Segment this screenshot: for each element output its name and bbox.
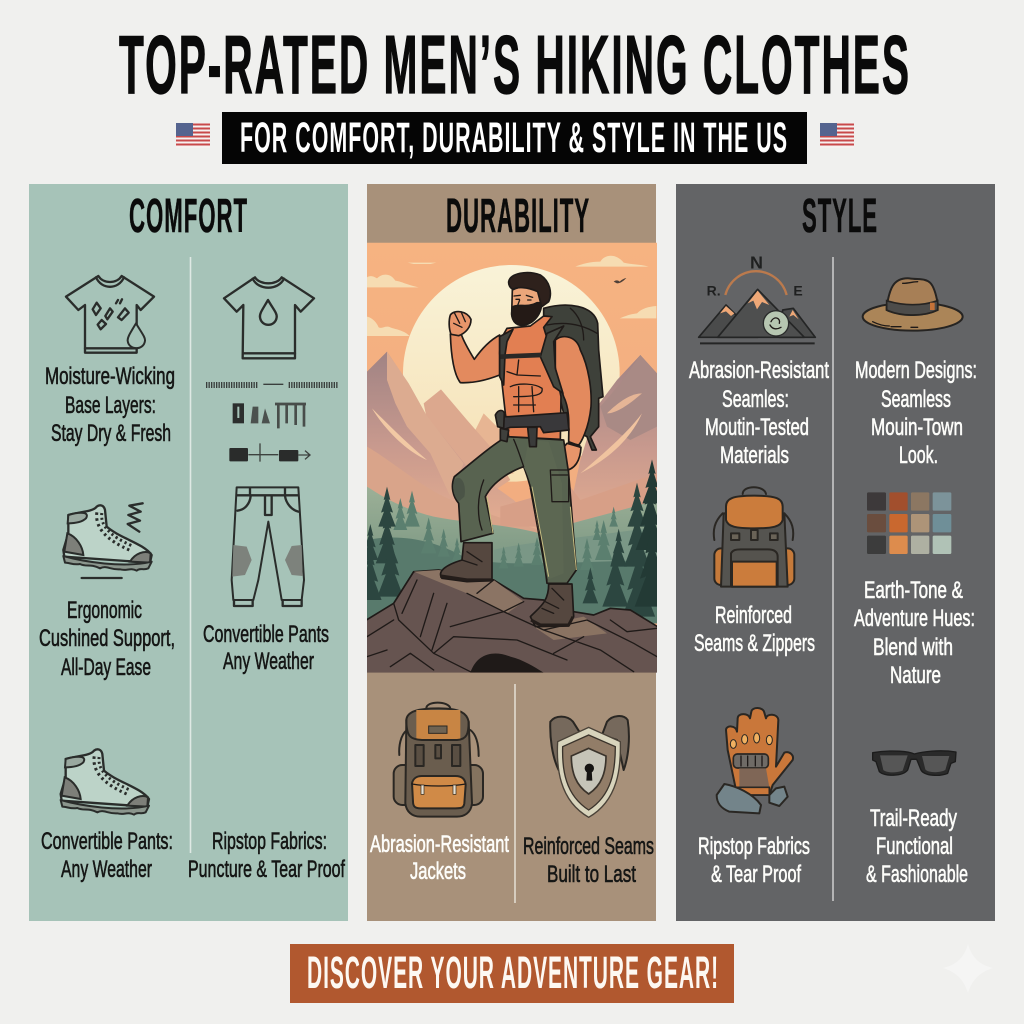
panel: comfort: COMFORT (129, 190, 248, 243)
mountains (367, 352, 657, 533)
text: reinforced seams built to last: Built to Last (547, 861, 636, 888)
panel: durability: DURABILITY (446, 190, 590, 243)
text: convertible pants any weather (right): Any Weather (223, 648, 314, 675)
text: moisture-wicking base layers: Base Layers: (65, 392, 156, 419)
panel: style: STYLE (802, 190, 878, 243)
text: modern designs: Seamless (881, 386, 951, 413)
text: moisture-wicking base layers: Moisture-Wicking (45, 363, 175, 390)
text: ripstop fabrics: Puncture & Tear Proof (188, 856, 345, 883)
head (509, 273, 550, 325)
icon: US flag right (820, 123, 854, 148)
durability icons (394, 703, 629, 817)
text: ripstop fabrics (188, 828, 345, 883)
belt and pouch (495, 410, 569, 447)
icon: t-shirt with water drop (224, 277, 314, 358)
illustration: hiker on mountain (359, 243, 669, 677)
text: reinforced seams built to last: Reinforced Seams (523, 833, 654, 860)
bird (614, 278, 626, 283)
text: earth-tone and adventure hues: Blend with (873, 634, 953, 661)
rear arm (555, 337, 591, 471)
text: trail-ready functional: & Fashionable (866, 861, 968, 888)
rock outcrop (364, 570, 660, 677)
pants (452, 437, 576, 583)
text: abrasion-resistant seamles (689, 357, 829, 469)
icon: sunglasses (873, 751, 956, 775)
text: convertible pants any weather (left): Any Weather (61, 856, 152, 883)
icon: sparkle (943, 944, 993, 993)
text: earth-tone and adventure hues: Earth-Tone & (864, 577, 963, 604)
text: abrasion-resistant jackets (370, 831, 509, 885)
icon: shield with keyhole (550, 716, 629, 817)
text: moisture-wicking base layers (45, 363, 175, 447)
backpack (544, 305, 603, 450)
style icons (699, 253, 963, 587)
clouds (367, 256, 656, 336)
text: reinforced seams and zippers (694, 602, 815, 657)
text: moisture-wicking base layers: Stay Dry & Fresh (51, 420, 171, 447)
text: ergonomic cushined support (39, 597, 175, 681)
icon: compass and mountains: E (793, 282, 803, 298)
text: ergonomic cushined support: All-Day Ease (61, 654, 151, 681)
text: ripstop fabrics and tear proof: Ripstop Fabrics (698, 833, 810, 860)
icon: backpack (394, 703, 483, 817)
icon: compass and mountains: N (750, 253, 763, 273)
icon: convertible pants (232, 487, 304, 606)
text: convertible pants any weather (left) (41, 828, 173, 883)
icon: colour swatch grid (867, 492, 951, 554)
panel: style (676, 184, 995, 921)
icon: garbled spec diagram (206, 384, 338, 462)
panel: comfort (29, 184, 348, 921)
icon: glove on rock (717, 708, 793, 813)
icon: US flag left (176, 123, 210, 148)
text: abrasion-resistant seamles: Abrasion-Resistant (689, 357, 829, 384)
subtitle banner (222, 112, 807, 164)
text: modern designs (855, 357, 977, 469)
text: reinforced seams and zippers: Reinforced (715, 602, 792, 629)
text: trail-ready functional: Functional (876, 833, 953, 860)
text: abrasion-resistant seamles: Moutin-Tested (705, 414, 809, 441)
icon: hiking boot (61, 749, 149, 815)
text: reinforced seams built to last (523, 833, 654, 888)
icon: compass and mountains (699, 253, 815, 343)
text: ripstop fabrics and tear proof (698, 833, 810, 888)
icon: backpack (714, 487, 794, 587)
torso with orange shirt (500, 316, 564, 439)
icon: hiking boot with spring (63, 503, 152, 578)
text: trail-ready functional (866, 805, 968, 888)
sun (403, 265, 620, 482)
text: abrasion-resistant seamles: Seamles: (722, 386, 789, 413)
raised arm and fist (449, 312, 500, 383)
text: reinforced seams and zippers: Seams & Zippers (694, 630, 815, 657)
icon: brimmed hat (863, 278, 963, 331)
text: modern designs: Mouin-Town (871, 414, 963, 441)
comfort icons (61, 276, 338, 815)
icon: compass and mountains: R. (707, 282, 721, 298)
call to action button (290, 944, 734, 1003)
text: trail-ready functional: Trail-Ready (870, 805, 957, 832)
text: earth-tone and adventure hues: Nature (890, 662, 941, 689)
boots (440, 543, 574, 627)
text: ergonomic cushined support: Cushined Support, (39, 625, 175, 652)
text: ripstop fabrics: Ripstop Fabrics: (212, 828, 327, 855)
text: abrasion-resistant seamles: Materials (720, 442, 789, 469)
text: convertible pants any weather (right): Convertible Pants (203, 621, 329, 648)
text: modern designs: Look. (899, 442, 938, 469)
text: ergonomic cushined support: Ergonomic (67, 597, 142, 624)
text: abrasion-resistant jackets: Abrasion-Resistant (370, 831, 509, 858)
panel: durability (359, 184, 669, 921)
icon: t-shirt with droplet (66, 276, 154, 353)
sky (367, 242, 657, 626)
text: convertible pants any weather (left): Convertible Pants: (41, 828, 173, 855)
text: abrasion-resistant jackets: Jackets (410, 858, 466, 885)
text: earth-tone and adventure hues (854, 577, 975, 689)
text: ripstop fabrics and tear proof: & Tear Proof (711, 861, 801, 888)
forest hills (359, 459, 669, 623)
icons lower style (717, 708, 956, 813)
text: convertible pants any weather (right) (203, 621, 329, 675)
